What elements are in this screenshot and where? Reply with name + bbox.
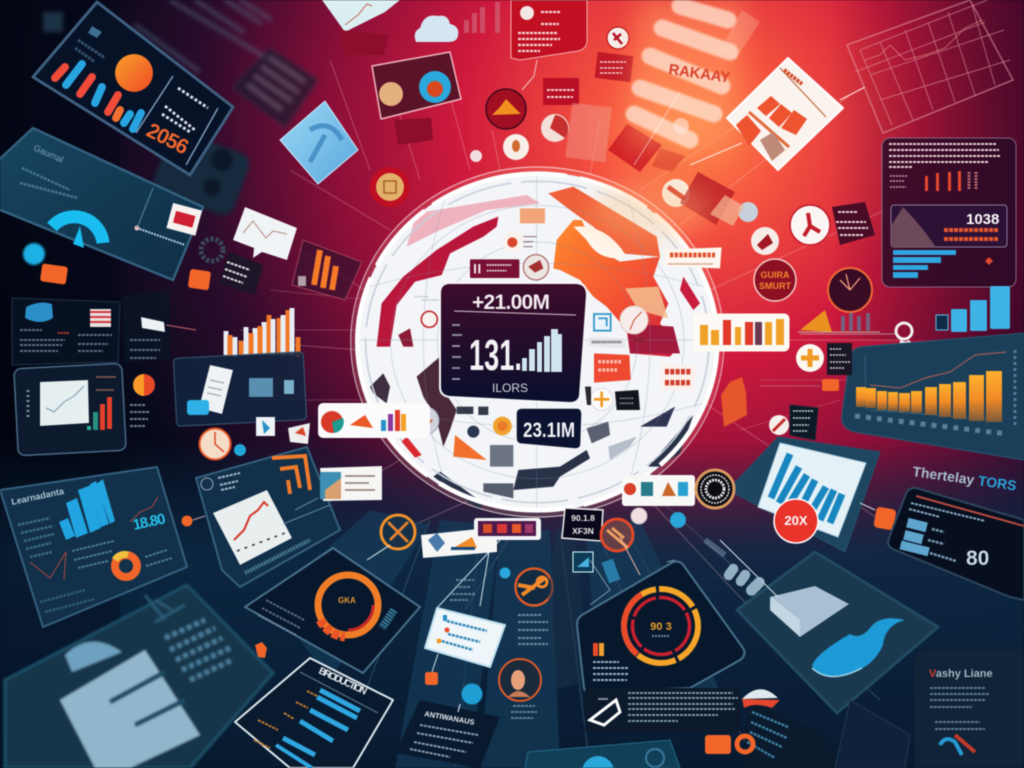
small text columns bbox=[450, 580, 548, 718]
panel: folder and swoosh bbox=[720, 540, 938, 713]
panel: white blue bars card bbox=[728, 437, 880, 552]
dark label left of bars bbox=[219, 252, 263, 295]
panel: dark side strip bbox=[548, 530, 590, 690]
orange glow overlay bbox=[590, 180, 710, 240]
panel: left cyan bars: Learnadanta bbox=[10, 486, 66, 507]
panel: bottom right text bbox=[915, 650, 1024, 768]
value 80: 80 bbox=[966, 547, 989, 570]
orange pin left bbox=[182, 516, 205, 526]
radial connector lines bbox=[230, 60, 905, 768]
orange tower with stripes bbox=[625, 0, 760, 165]
panel: document and cyan box bbox=[173, 352, 307, 426]
heading right: Thertelay TORS bbox=[912, 463, 1018, 494]
white slash icon bbox=[662, 179, 690, 207]
coin icon bbox=[370, 167, 410, 207]
clock circle bbox=[200, 417, 310, 460]
plus icon and label bbox=[760, 343, 852, 391]
red labels upper center bbox=[543, 52, 685, 172]
caption: ILORS bbox=[492, 381, 528, 395]
speech bubble chart bbox=[233, 207, 297, 260]
circle icons right: GUIRA bbox=[760, 270, 790, 280]
pie circle and text bbox=[130, 374, 155, 426]
tower label: RAKAAY bbox=[667, 61, 731, 87]
orange shirt shape bbox=[721, 377, 747, 427]
blue swoosh bbox=[812, 618, 905, 676]
card lower center bbox=[421, 527, 497, 558]
purple widget row bbox=[474, 518, 541, 540]
orange connector square bbox=[873, 506, 897, 531]
cloud icon bbox=[415, 16, 458, 42]
panel: small text with arrow bbox=[122, 290, 196, 362]
value: 18.80 bbox=[131, 510, 167, 534]
panel: teal gauge bbox=[0, 128, 203, 280]
orange chevrons bbox=[272, 456, 310, 494]
graticule bbox=[360, 177, 717, 510]
panel: blue bars bottom bbox=[235, 658, 393, 768]
circular icon row top bbox=[470, 27, 689, 162]
panel: bottom cyan tab bbox=[525, 740, 680, 768]
panel: blue bars bottom: BRODUCTION bbox=[317, 666, 369, 698]
bar chart white and orange bbox=[226, 308, 298, 357]
white card left pie bbox=[318, 403, 430, 438]
headline value: +21.00M bbox=[472, 291, 550, 314]
panel: left cyan bars bbox=[0, 467, 187, 627]
donut ring bbox=[624, 589, 698, 663]
divider and sub panel bbox=[136, 76, 218, 165]
panel: right donut bbox=[577, 560, 744, 692]
top card chart bbox=[322, 0, 400, 32]
mini bars bbox=[522, 329, 562, 372]
portrait circle bbox=[499, 659, 541, 701]
panel: text bottom center: ANTIWANAUS bbox=[424, 709, 475, 727]
white bar card right bbox=[694, 314, 789, 351]
panel: dim text bottom bbox=[835, 700, 910, 768]
orange sphere bbox=[115, 54, 153, 92]
rim rings bbox=[351, 167, 724, 517]
icon squares in lower center bbox=[573, 512, 725, 605]
panel: secondary stat card: 23.1IM bbox=[523, 419, 575, 442]
oval tiles bbox=[722, 562, 767, 598]
ring medallion bbox=[696, 470, 734, 508]
cyan bars bbox=[59, 479, 115, 540]
panel: white blue bars card: 20X bbox=[784, 513, 808, 528]
circle icon orange ring left bbox=[367, 515, 415, 560]
white report card bbox=[690, 58, 865, 170]
panel: central stat card bbox=[440, 283, 587, 403]
panel: right donut: 90 3 bbox=[650, 621, 672, 633]
white ring marker bbox=[800, 323, 912, 343]
panel: top left dashboard bbox=[33, 2, 233, 175]
main value: 131. bbox=[469, 331, 522, 380]
right text panel bbox=[882, 138, 1016, 287]
red ring icon lower bbox=[601, 508, 647, 575]
land masses bbox=[377, 217, 498, 347]
blue bars top right corner bbox=[936, 286, 1010, 332]
white info card center bbox=[425, 608, 505, 667]
panel: globe bbox=[351, 166, 724, 518]
grid chart top right bbox=[847, 0, 1013, 133]
panel: airplane text bbox=[585, 688, 740, 733]
hat icon bbox=[742, 689, 780, 708]
dark red text labels top bbox=[340, 30, 433, 145]
circle icons right: SMURT bbox=[759, 281, 791, 291]
heading: Vashy Liane bbox=[929, 668, 993, 680]
number 2056: 2056 bbox=[143, 119, 192, 159]
panel: teal gauge: Gaumal bbox=[32, 143, 65, 165]
orange bars panel bbox=[292, 240, 362, 300]
red badge bbox=[774, 499, 818, 543]
card lower right globe bbox=[622, 475, 695, 506]
panel: pale blurred device bbox=[5, 585, 273, 768]
circle icons right bbox=[738, 202, 872, 312]
orange square and ring bbox=[705, 735, 753, 754]
blue tilted card bbox=[280, 101, 358, 184]
panel: big orange bar chart bbox=[842, 333, 1024, 460]
panel: white line chart bbox=[14, 363, 126, 456]
panel: secondary stat card bbox=[516, 408, 582, 449]
panel orange blur bbox=[680, 172, 735, 225]
panel: bottom text block right bbox=[742, 700, 850, 768]
peach blocks near globe bbox=[710, 195, 744, 226]
black label lower: 90.1.8 bbox=[571, 513, 595, 523]
gauge arc bbox=[52, 217, 103, 243]
orange pin low left bbox=[255, 642, 267, 658]
photo panel with two circles bbox=[372, 52, 461, 119]
red ticks bbox=[925, 171, 961, 191]
small left markers bbox=[23, 239, 223, 290]
dark label right bbox=[832, 202, 875, 245]
panel: phone with 80 bbox=[888, 488, 1024, 600]
blue bars bbox=[893, 250, 956, 278]
small charts near top bbox=[798, 310, 880, 332]
blue columns lower center bbox=[270, 510, 720, 768]
panel: white line chart center left bbox=[196, 447, 340, 587]
inside-globe widgets bbox=[402, 208, 722, 460]
donut bbox=[115, 555, 137, 577]
black label lower bbox=[562, 508, 603, 541]
circle icon red ring key bbox=[516, 568, 552, 606]
panel: left donut: GKA bbox=[338, 596, 356, 605]
white card left landscape bbox=[320, 466, 382, 501]
inner panel bbox=[891, 205, 1007, 247]
value 1038: 1038 bbox=[966, 211, 999, 228]
black label lower: XF3N bbox=[572, 526, 594, 536]
dotted line bbox=[137, 228, 185, 245]
panel: text bottom center bbox=[395, 700, 500, 768]
red note panel bbox=[511, 0, 587, 90]
red mini card bbox=[166, 203, 202, 236]
slash marker and label bbox=[769, 405, 818, 440]
panel: small text left bbox=[12, 298, 120, 365]
small connectors lower bbox=[425, 540, 510, 712]
bars in dashboard bbox=[55, 64, 141, 129]
panel: blurred text top left bbox=[43, 0, 318, 218]
dim bars top center bbox=[464, 2, 500, 33]
panel: left donut bbox=[245, 548, 420, 673]
globe body bbox=[357, 172, 717, 512]
